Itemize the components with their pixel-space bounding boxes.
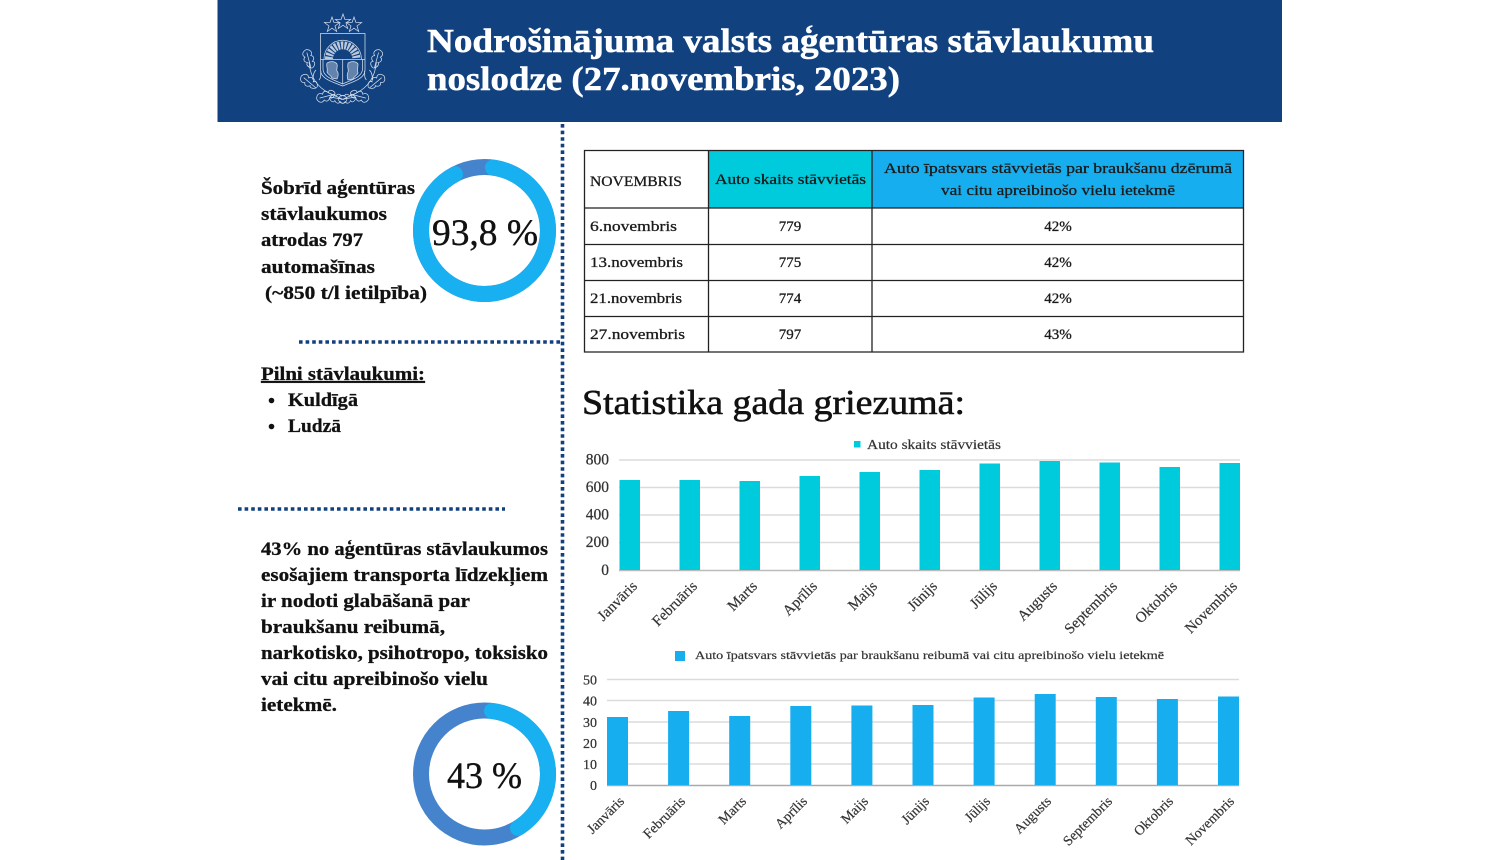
bar chart: cars in parking lots: 0 bbox=[601, 562, 609, 579]
bar chart: share of cars for drunk driving: 20 bbox=[583, 737, 597, 752]
data table: November: 42% bbox=[1044, 255, 1072, 271]
bar chart: share of cars for drunk driving: Jūnijs bbox=[899, 794, 933, 828]
bar chart: cars in parking lots: Jūlijs bbox=[967, 578, 1001, 612]
data table: November: 42% bbox=[1044, 219, 1072, 235]
bar chart: share of cars for drunk driving: Oktobris bbox=[1132, 794, 1177, 839]
text block: current occupancy: atrodas 797 bbox=[261, 230, 364, 251]
heading: yearly statistics: Statistika gada griezumā: bbox=[582, 383, 965, 422]
data table: November: 27.novembris bbox=[590, 327, 685, 343]
text block: 43 % explanation: ir nodoti glabāšanā par bbox=[261, 591, 471, 612]
bar chart: share of cars for drunk driving: Septembris bbox=[1061, 794, 1116, 849]
text block: current occupancy: Šobrīd aģentūras bbox=[261, 177, 415, 199]
bar chart: share of cars for drunk driving: Auto īpatsvars stāvvietās par braukšanu reibumā vai citu apreibinošo vielu ietekmē bbox=[695, 648, 1164, 662]
bar chart: cars in parking lots: 400 bbox=[586, 506, 609, 524]
data table: November bbox=[584, 150, 1244, 352]
bar chart: share of cars for drunk driving: Janvāris bbox=[585, 794, 628, 837]
bar chart: share of cars for drunk driving: Augusts bbox=[1012, 794, 1055, 837]
text block: 43 % explanation: narkotisko, psihotropo, toksisko bbox=[261, 643, 548, 664]
dotted dividers bbox=[238, 124, 562, 860]
bar chart: cars in parking lots: Marts bbox=[725, 578, 761, 615]
data table: November: 779 bbox=[779, 219, 801, 235]
text block: 43 % explanation: 43% no aģentūras stāvlaukumos bbox=[261, 539, 548, 560]
bar chart: share of cars for drunk driving: Marts bbox=[716, 794, 750, 828]
text block: 43 % explanation: ietekmē. bbox=[261, 695, 337, 716]
bar chart: share of cars for drunk driving: Februāris bbox=[641, 794, 689, 842]
donut chart: 93,8 % bbox=[421, 167, 548, 294]
text block: current occupancy bbox=[261, 177, 427, 304]
data table: November: 13.novembris bbox=[590, 255, 683, 271]
donut chart: 43 %: 43 % bbox=[447, 756, 522, 797]
data table: November: Auto īpatsvars stāvvietās par braukšanu dzērumā bbox=[884, 161, 1232, 177]
donut chart: 93,8 %: 93,8 % bbox=[432, 213, 538, 254]
bar chart: share of cars for drunk driving: 10 bbox=[583, 758, 597, 773]
text block: current occupancy: automašīnas bbox=[261, 257, 375, 278]
text block: 43 % explanation: vai citu apreibinošo vielu bbox=[261, 669, 488, 690]
data table: November: 21.novembris bbox=[590, 291, 682, 307]
bar chart: share of cars for drunk driving: 50 bbox=[583, 674, 597, 688]
text block: full parking lots: Pilni stāvlaukumi: bbox=[261, 364, 425, 385]
text block: full parking lots: Ludzā bbox=[288, 416, 342, 437]
bar chart: cars in parking lots: Augusts bbox=[1015, 578, 1061, 625]
icon: Latvian coat of arms bbox=[298, 14, 387, 105]
data table: November: NOVEMBRIS bbox=[590, 174, 682, 190]
bar chart: cars in parking lots: Janvāris bbox=[595, 578, 641, 625]
text block: current occupancy: (~850 t/l ietilpība) bbox=[265, 283, 427, 304]
text block: full parking lots: Kuldīgā bbox=[288, 390, 359, 411]
text block: current occupancy: stāvlaukumos bbox=[261, 204, 387, 225]
bar chart: cars in parking lots: Februāris bbox=[649, 578, 701, 630]
data table: November: 797 bbox=[779, 327, 802, 343]
data table: November: vai citu apreibinošo vielu ietekmē bbox=[941, 183, 1175, 199]
bar chart: share of cars for drunk driving: 30 bbox=[583, 716, 597, 731]
text block: full parking lots bbox=[261, 364, 425, 437]
bar chart: cars in parking lots: Auto skaits stāvvietās bbox=[867, 437, 1001, 452]
bar chart: share of cars for drunk driving: 0 bbox=[590, 779, 597, 794]
bar chart: share of cars for drunk driving: 40 bbox=[583, 694, 597, 710]
data table: November: Auto skaits stāvvietās bbox=[715, 172, 866, 188]
title bbox=[427, 23, 1154, 98]
bar chart: cars in parking lots bbox=[586, 437, 1241, 638]
text block: 43 % explanation: esošajiem transporta līdzekļiem bbox=[261, 565, 548, 586]
bar chart: cars in parking lots: 600 bbox=[586, 479, 609, 496]
bar chart: share of cars for drunk driving: Maijs bbox=[839, 794, 872, 827]
data table: November: 43% bbox=[1044, 327, 1072, 343]
bar chart: share of cars for drunk driving: Aprīlis bbox=[773, 794, 811, 832]
bar chart: cars in parking lots: Novembris bbox=[1182, 578, 1241, 637]
data table: November: 775 bbox=[779, 255, 801, 271]
title: Nodrošinājuma valsts aģentūras stāvlaukumu bbox=[427, 23, 1154, 60]
bar chart: share of cars for drunk driving bbox=[583, 648, 1239, 849]
donut chart: 43 % bbox=[421, 710, 548, 838]
bar chart: cars in parking lots: 200 bbox=[586, 534, 609, 551]
bar chart: cars in parking lots: 800 bbox=[586, 452, 609, 468]
text block: 43 % explanation: braukšanu reibumā, bbox=[261, 617, 445, 638]
bar chart: share of cars for drunk driving: Novembris bbox=[1183, 794, 1238, 849]
bar chart: cars in parking lots: Jūnijs bbox=[905, 578, 941, 615]
data table: November: 6.novembris bbox=[590, 219, 677, 235]
bar chart: cars in parking lots: Maijs bbox=[845, 578, 881, 614]
bar chart: cars in parking lots: Oktobris bbox=[1132, 578, 1181, 627]
bar chart: cars in parking lots: Aprīlis bbox=[780, 578, 821, 619]
header banner bbox=[218, 0, 1282, 122]
bar chart: cars in parking lots: Septembris bbox=[1062, 578, 1121, 638]
bar chart: share of cars for drunk driving: Jūlijs bbox=[962, 794, 994, 826]
text block: 43 % explanation bbox=[261, 539, 548, 716]
title: noslodze (27.novembris, 2023) bbox=[427, 61, 900, 98]
data table: November: 774 bbox=[779, 291, 802, 307]
data table: November: 42% bbox=[1044, 291, 1072, 307]
